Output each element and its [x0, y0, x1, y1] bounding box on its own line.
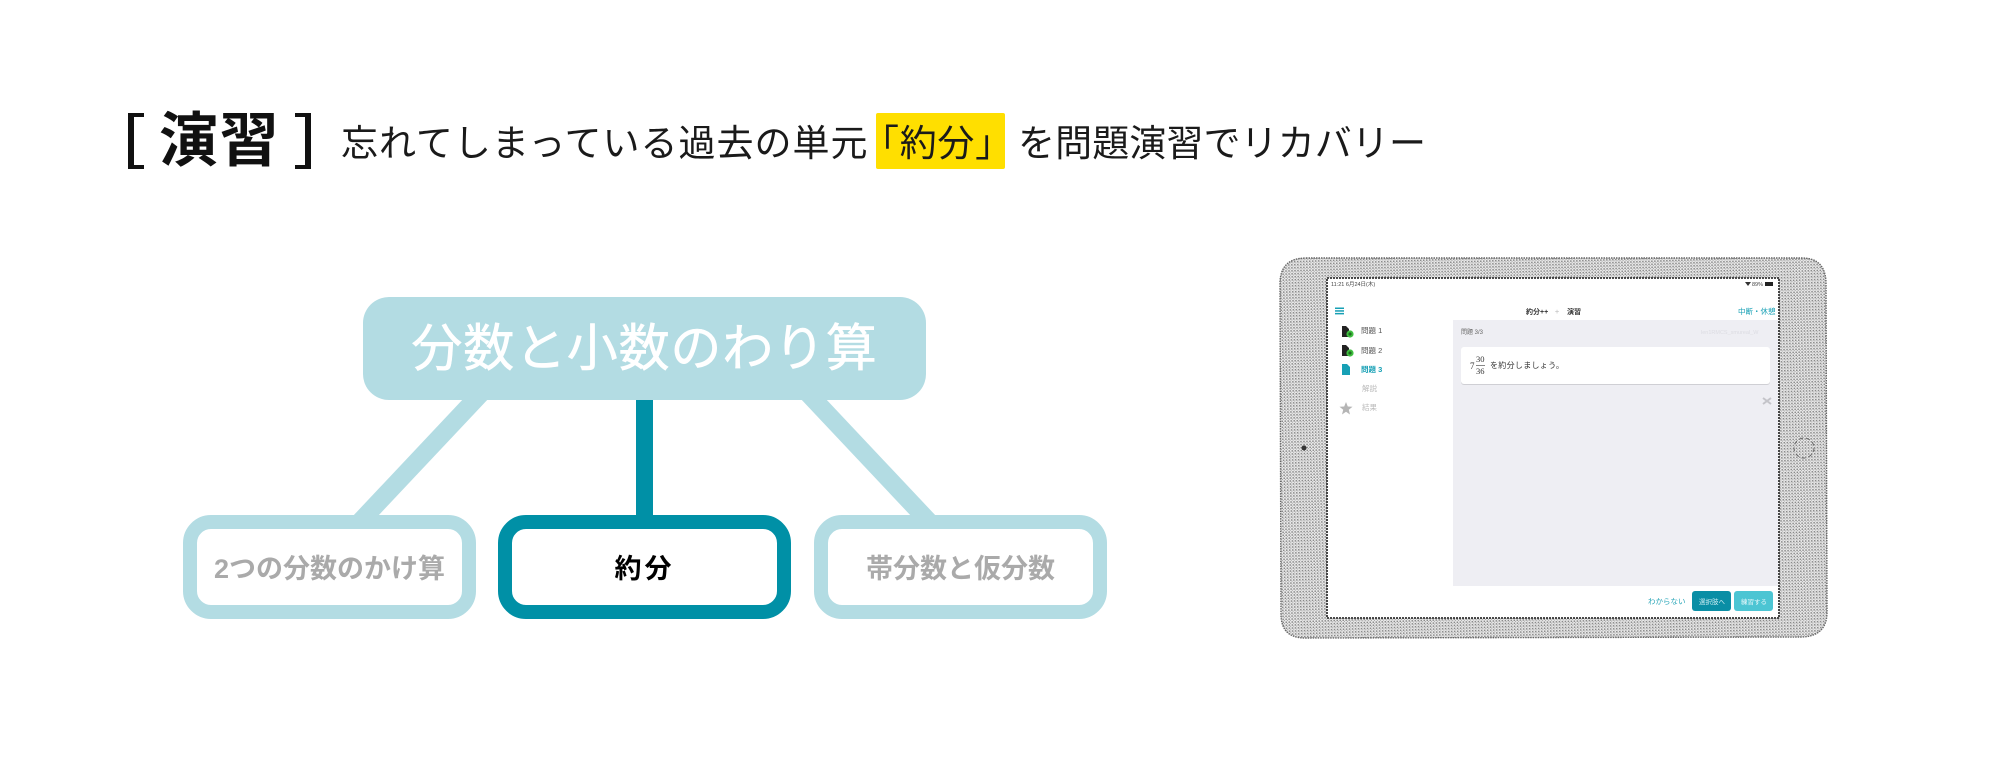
connector: center branch	[636, 397, 653, 519]
content background	[1453, 320, 1778, 586]
sidebar items	[1361, 326, 1382, 412]
status bar: 11:21 6月24日(木)	[1331, 280, 1375, 288]
question card: 36	[1476, 366, 1484, 376]
highlight: yellow box behind 約分	[876, 113, 1005, 169]
suspend link: 中断・休憩	[1738, 306, 1776, 316]
connector: right branch	[802, 400, 935, 515]
child node: 帯分数と仮分数	[814, 515, 1107, 619]
home button	[1794, 438, 1814, 458]
child node: 2つの分数のかけ算	[183, 515, 476, 619]
app title: 約分++	[1526, 307, 1548, 316]
button: practice: 練習する	[1741, 597, 1767, 606]
parent node: 分数と小数のわり算: 分数と小数のわり算	[411, 320, 878, 377]
question card	[1461, 347, 1770, 385]
tools icon	[1763, 398, 1771, 404]
tablet illustration	[1279, 257, 1828, 639]
status bar	[1331, 280, 1773, 288]
child node: 2つの分数のかけ算: 2つの分数のかけ算	[214, 554, 445, 584]
don't know link: わからない	[1648, 597, 1686, 606]
sidebar icon: problem 3 current	[1342, 364, 1350, 375]
question card: を約分しましょう。	[1490, 360, 1564, 370]
sidebar items: 問題 3	[1361, 365, 1382, 374]
sidebar items: 問題 2	[1361, 346, 1382, 355]
hamburger menu	[1335, 308, 1344, 314]
subtitle text: first part: 忘れてしまっている過去の単元	[341, 123, 869, 164]
heading: 演習 label with brackets: 演習	[159, 108, 280, 174]
subtitle text: last part: を問題演習でリカバリー	[1018, 123, 1426, 164]
subtitle text: highlighted word: 「約分」	[862, 123, 1013, 164]
question counter: 問題 3/3	[1461, 329, 1484, 336]
tablet body with halftone shading	[1280, 258, 1827, 638]
sidebar items: 結果	[1362, 402, 1378, 412]
screen	[1327, 278, 1779, 618]
status bar: 89%	[1752, 282, 1763, 288]
child node: 約分 (highlighted)	[498, 515, 791, 619]
camera	[1302, 446, 1306, 450]
app title: +	[1555, 309, 1559, 316]
app title	[1526, 307, 1581, 316]
sidebar icon: star	[1340, 402, 1352, 414]
sidebar icon: problem 2 done	[1342, 345, 1354, 357]
connector: left branch	[354, 400, 487, 515]
faint question id: len1RMCS_smureal_W	[1701, 330, 1759, 336]
sidebar items: 解説	[1362, 383, 1378, 393]
button: go to choices	[1692, 591, 1731, 611]
heading: 演習 label with brackets	[128, 108, 311, 174]
child node: 帯分数と仮分数: 帯分数と仮分数	[866, 554, 1055, 584]
diagram: concept tree	[354, 297, 935, 515]
sidebar icon: problem 1 done	[1342, 326, 1354, 338]
parent node: 分数と小数のわり算	[363, 297, 926, 400]
app title: 演習	[1567, 307, 1581, 316]
question card: 30	[1476, 354, 1484, 364]
button: go to choices: 選択肢へ	[1699, 597, 1726, 606]
question card: 7	[1470, 361, 1475, 371]
sidebar items: 問題 1	[1361, 326, 1382, 335]
button: practice	[1734, 591, 1773, 611]
child node: 約分 (highlighted): 約分	[614, 554, 674, 584]
